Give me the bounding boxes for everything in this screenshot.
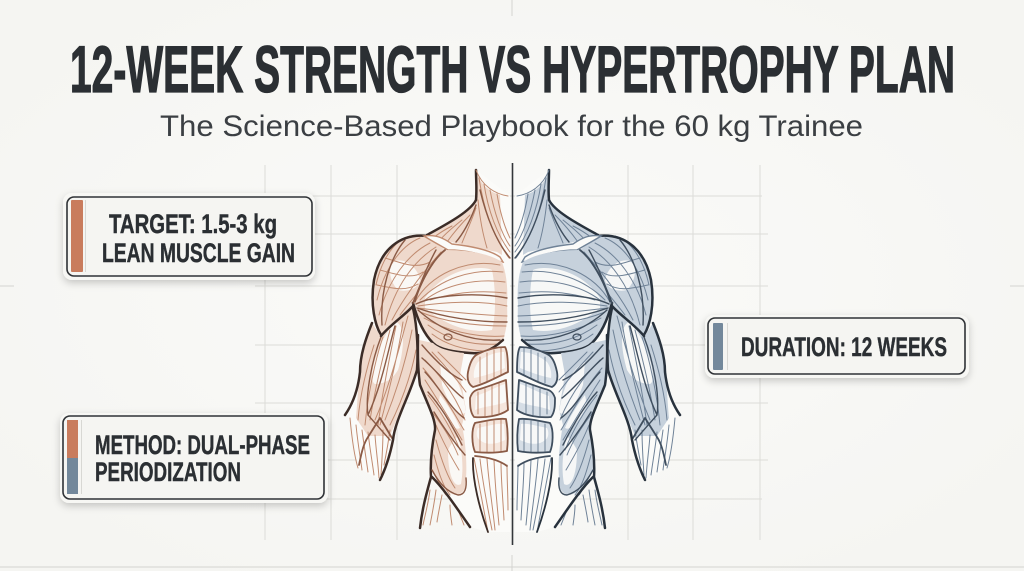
subtitle: The Science-Based Playbook for the 60 kg Trainee [160,110,863,143]
callout: method: PERIODIZATION [95,457,241,487]
callout: target: LEAN MUSCLE GAIN [102,238,295,268]
anatomy: left strength half [345,170,510,532]
callout: method [60,413,328,503]
abdominal blocks [468,347,508,532]
callout: target: TARGET: 1.5-3 kg [109,209,277,239]
torso side and obliques [418,335,470,528]
clavicle band [424,236,503,262]
callout: method: METHOD: DUAL-PHASE [95,430,310,460]
anatomy: right hypertrophy half [515,170,680,532]
arm [345,306,418,480]
body base silhouette [345,170,510,532]
callout: target [63,193,315,280]
callout: duration [705,315,969,378]
deltoid [373,236,445,335]
center divider [512,163,514,545]
pectoral [413,250,507,353]
neck and trapezius [427,170,510,258]
